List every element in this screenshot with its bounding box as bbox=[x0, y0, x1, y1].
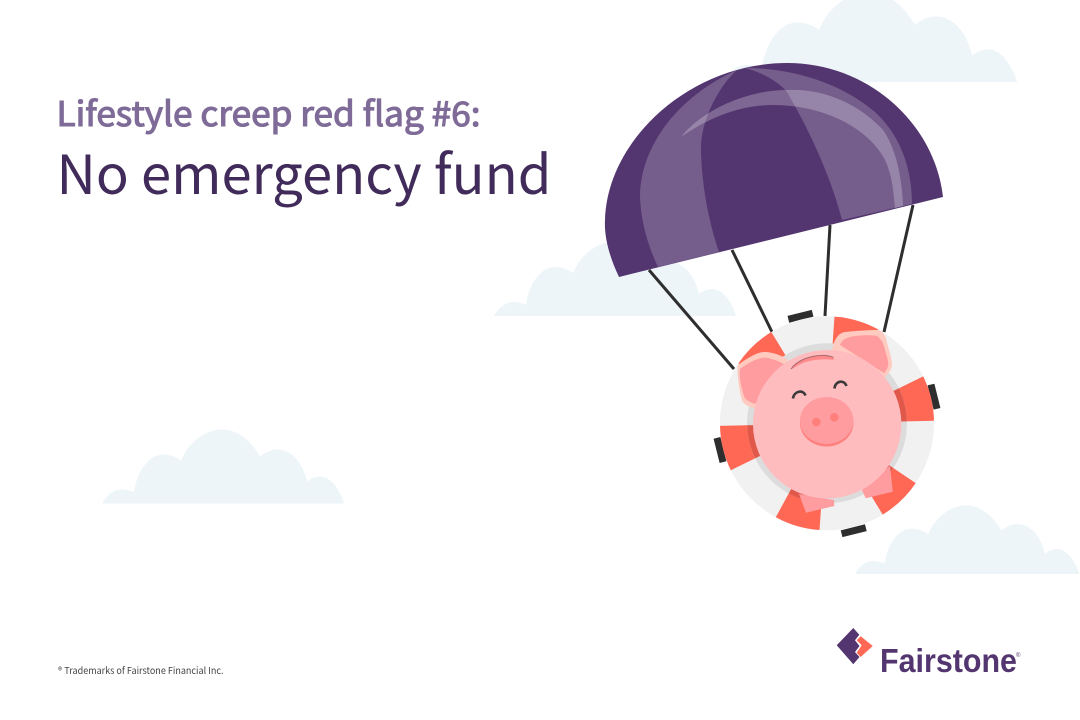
canopy highlight bbox=[681, 90, 903, 208]
logo: Fairstone: ® bbox=[1016, 652, 1021, 659]
parachute canopy bbox=[605, 63, 943, 277]
cloud: bottom right bbox=[855, 505, 1079, 574]
coin slot bbox=[791, 355, 834, 370]
logo wordmark: Fairstone bbox=[880, 642, 1017, 679]
life ring with piggy bank bbox=[714, 310, 940, 537]
ring body bbox=[720, 316, 934, 530]
cloud: top right bbox=[723, 0, 1017, 82]
cloud: left bbox=[102, 430, 344, 504]
parachute strings bbox=[649, 205, 913, 369]
pig legs bbox=[799, 466, 893, 513]
pig left ear bbox=[738, 352, 788, 408]
pig eyes bbox=[793, 382, 846, 398]
canopy left panel bbox=[640, 70, 737, 267]
ring red segments bbox=[720, 317, 934, 530]
cloud: middle bbox=[494, 242, 736, 316]
ring handles bbox=[714, 310, 940, 537]
pig body bbox=[753, 350, 901, 498]
pig snout bbox=[800, 397, 853, 446]
title: No emergency fund bbox=[56, 131, 552, 210]
subtitle: Lifestyle creep red flag #6: bbox=[56, 87, 480, 136]
logo mark bbox=[837, 628, 860, 664]
canopy right panel bbox=[745, 68, 912, 220]
ring inner shadow bbox=[747, 343, 907, 503]
pig right ear bbox=[832, 330, 892, 377]
footer trademark note: ® Trademarks of Fairstone Financial Inc. bbox=[58, 663, 224, 677]
logo: Fairstone bbox=[837, 628, 1021, 679]
